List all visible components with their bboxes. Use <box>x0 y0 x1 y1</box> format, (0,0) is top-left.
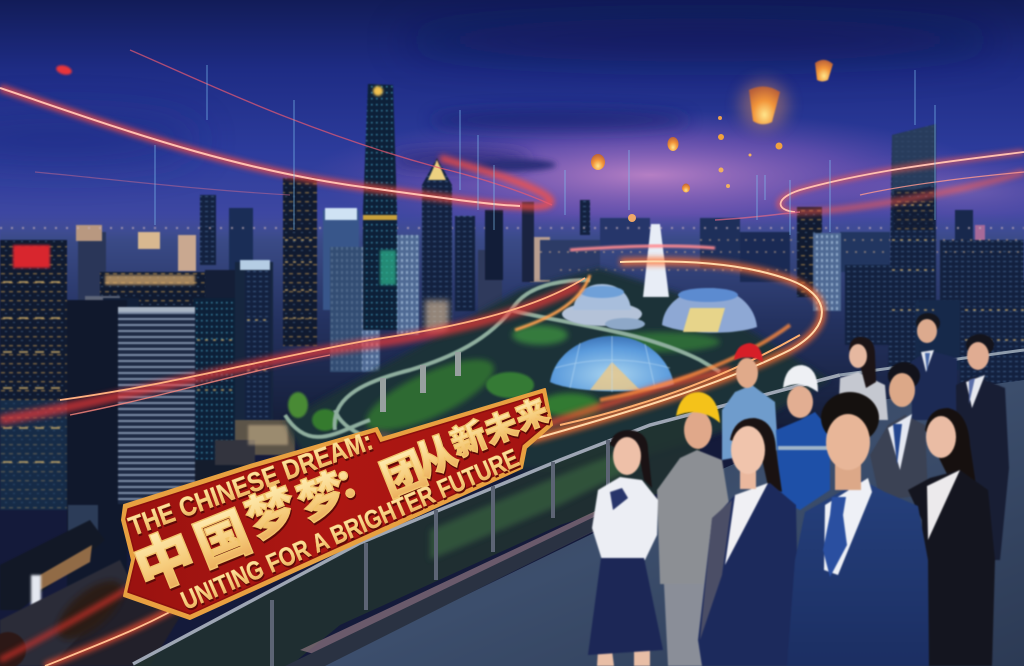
person: student in uniform <box>588 430 663 666</box>
railing glass and lower terrace edge <box>133 408 700 666</box>
dome medium <box>662 288 757 333</box>
heading: Chinese title <box>125 392 554 604</box>
person: front man in blue suit <box>787 392 929 666</box>
heading: Chinese title: 来 <box>510 392 554 438</box>
person: worker with yellow helmet <box>657 392 730 666</box>
dome large <box>550 336 674 392</box>
person: back right man <box>956 334 1009 560</box>
railing <box>133 350 1024 666</box>
distant city skyline <box>0 195 1024 425</box>
mid-ground skyscrapers <box>85 84 1024 498</box>
foreground left towers <box>0 240 295 666</box>
heading: Chinese title: 团 <box>374 444 434 506</box>
heading: Chinese title: 从 <box>408 428 464 486</box>
person: man in grey suit <box>870 362 928 500</box>
person: worker with red helmet <box>722 343 778 460</box>
heading: top English line: THE CHINESE DREAM: <box>125 426 377 542</box>
heading: Chinese title: 中 <box>125 520 205 604</box>
green park with elevated roads <box>285 268 830 470</box>
dome small <box>562 284 645 330</box>
icon: red distant lantern <box>55 64 73 76</box>
light trails in sky <box>0 50 1024 220</box>
title text <box>125 392 554 616</box>
elevated roads <box>285 280 720 450</box>
person: worker with white helmet <box>776 365 830 510</box>
person: back row man <box>911 313 957 420</box>
heading: Chinese title: 梦 <box>290 464 354 530</box>
banner plate <box>122 389 552 619</box>
rooftop terrace floor <box>320 380 1024 666</box>
red rooftop sign <box>13 245 50 268</box>
icon: white monument tower <box>643 224 669 297</box>
title banner <box>122 389 554 619</box>
heading: bottom English line: UNITING FOR A BRIGHTER FUTURE <box>176 442 523 616</box>
icon: lantern upper right <box>815 60 833 82</box>
heading: Chinese title: 梦 <box>238 479 306 549</box>
heading: Chinese title: 国 <box>187 502 259 578</box>
person: woman in navy suit <box>698 418 799 666</box>
icon: large lantern <box>749 86 780 124</box>
heading: Chinese title: 未 <box>479 405 523 451</box>
heading: Chinese title: ： <box>329 453 383 509</box>
domes and white monument <box>550 224 757 392</box>
person: woman in black suit <box>908 408 995 666</box>
ground light trails <box>0 246 822 666</box>
vertical light beams <box>155 65 935 235</box>
heading: Chinese title: 新 <box>445 415 493 465</box>
night sky background <box>0 0 1024 280</box>
sky lanterns <box>55 60 833 222</box>
person: woman in white blouse <box>838 337 888 420</box>
people group <box>588 313 1009 666</box>
